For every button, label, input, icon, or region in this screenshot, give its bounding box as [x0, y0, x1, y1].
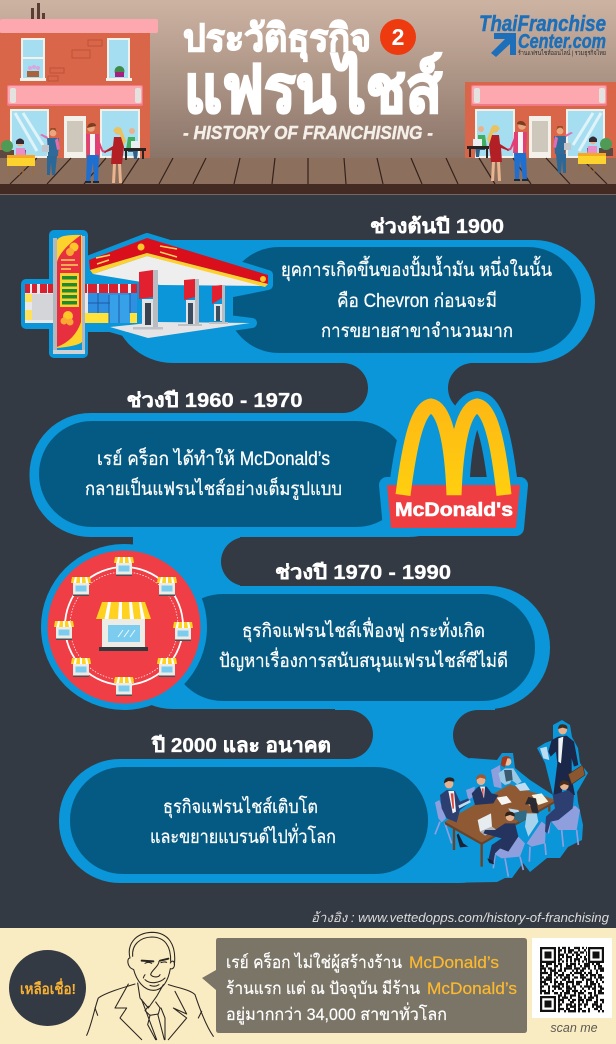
icon: franchise network [41, 544, 207, 710]
scan me caption: scan me [550, 1021, 598, 1035]
panel: did you know footer [0, 928, 616, 1044]
speech bubble: McDonald’s [409, 953, 499, 972]
woman seated [498, 756, 522, 785]
panel: 1960-1970 [39, 421, 409, 527]
icon: gas station [25, 235, 268, 354]
speech bubble: เรย์ คร็อก ไม่ใช่ผู้สร้างร้าน [226, 951, 402, 973]
speech bubble [202, 938, 527, 1033]
people left [0, 123, 146, 183]
canopy [89, 238, 268, 287]
icon: McDonald's logo [387, 406, 520, 528]
episode number badge [380, 19, 416, 55]
man second [472, 774, 498, 805]
panel: 1970-1990: ธุรกิจแฟรนไชส์เฟื่องฟู กระทั่งเกิด [242, 617, 485, 643]
chairs [435, 765, 580, 877]
heading: 1970-1990: ช่วงปี 1970 - 1990 [275, 561, 451, 584]
icon: McDonald's logo: McDonald's [395, 500, 513, 521]
sticker outline [26, 235, 268, 353]
subtitle: - HISTORY OF FRANCHISING - [183, 123, 433, 143]
logo [479, 11, 606, 57]
panel: early 1900: การขยายสาขาจำนวนมาก [321, 321, 513, 342]
speech bubble: McDonald’s [427, 979, 517, 998]
store building [25, 284, 137, 323]
panel: early 1900: คือ Chevron ก่อนจะมี [337, 290, 497, 312]
citation: อ้างอิง : www.vettedopps.com/history-of-franchising [311, 910, 610, 925]
central shop [96, 602, 151, 651]
episode number badge: 2 [392, 24, 404, 50]
title [183, 18, 443, 126]
right building [465, 82, 616, 158]
sticker outline [428, 720, 588, 883]
speech bubble: ร้านแรก แต่ ณ ปัจจุบัน มีร้าน [226, 979, 420, 999]
badge: unbelievable [9, 950, 86, 1026]
forecourt [110, 322, 250, 338]
standing man [540, 724, 585, 795]
heading: 2000 and future: ปี 2000 และ อนาคต [151, 734, 331, 757]
QR code [532, 938, 612, 1018]
pumps [133, 270, 228, 330]
man right [545, 781, 574, 833]
woman front [512, 797, 539, 837]
left building [0, 3, 158, 158]
small shops [54, 557, 193, 696]
speech bubble: อยู่มากกว่า 34,000 สาขาทั่วโลก [226, 1002, 447, 1025]
man left [440, 777, 471, 847]
people right [467, 121, 613, 181]
panel: 1970-1990 [170, 594, 535, 701]
heading: 1960-1970: ช่วงปี 1960 - 1970 [126, 389, 302, 412]
icon: business meeting [428, 720, 588, 883]
title: แฟรนไชส์ [184, 51, 443, 126]
table [445, 784, 556, 867]
papers and laptop [478, 783, 548, 836]
panel: 2000 and future: ธุรกิจแฟรนไชส์เติบโต [163, 795, 318, 819]
panel: 1970-1990: ปัญหาเรื่องการสนับสนุนแฟรนไชส์ซีไม่ดี [219, 647, 508, 673]
timeline ribbon [30, 240, 603, 883]
man front [483, 812, 518, 864]
panel: 1960-1970: เรย์ คร็อก ได้ทำให้ McDonald’s [97, 446, 330, 470]
title: ประวัติธุรกิจ [183, 18, 371, 62]
panel: 1960-1970: กลายเป็นแฟรนไชส์อย่างเต็มรูปแบบ [85, 476, 342, 500]
badge: unbelievable: เหลือเชื่อ! [20, 978, 76, 998]
price pylon [53, 235, 85, 354]
panel: early 1900: ยุคการเกิดขึ้นของปั้มน้ำมัน หนึ่งในนั้น [281, 256, 552, 282]
boardwalk [0, 158, 616, 194]
panel: 2000 and future: และขยายแบรนด์ไปทั่วโลก [150, 823, 336, 848]
panel: 2000 and future [70, 767, 428, 874]
heading: early 1900: ช่วงต้นปี 1900 [370, 215, 504, 238]
portrait: Ray Kroc line drawing [87, 932, 213, 1040]
panel: header [0, 0, 616, 195]
panel: early 1900 [226, 247, 581, 353]
